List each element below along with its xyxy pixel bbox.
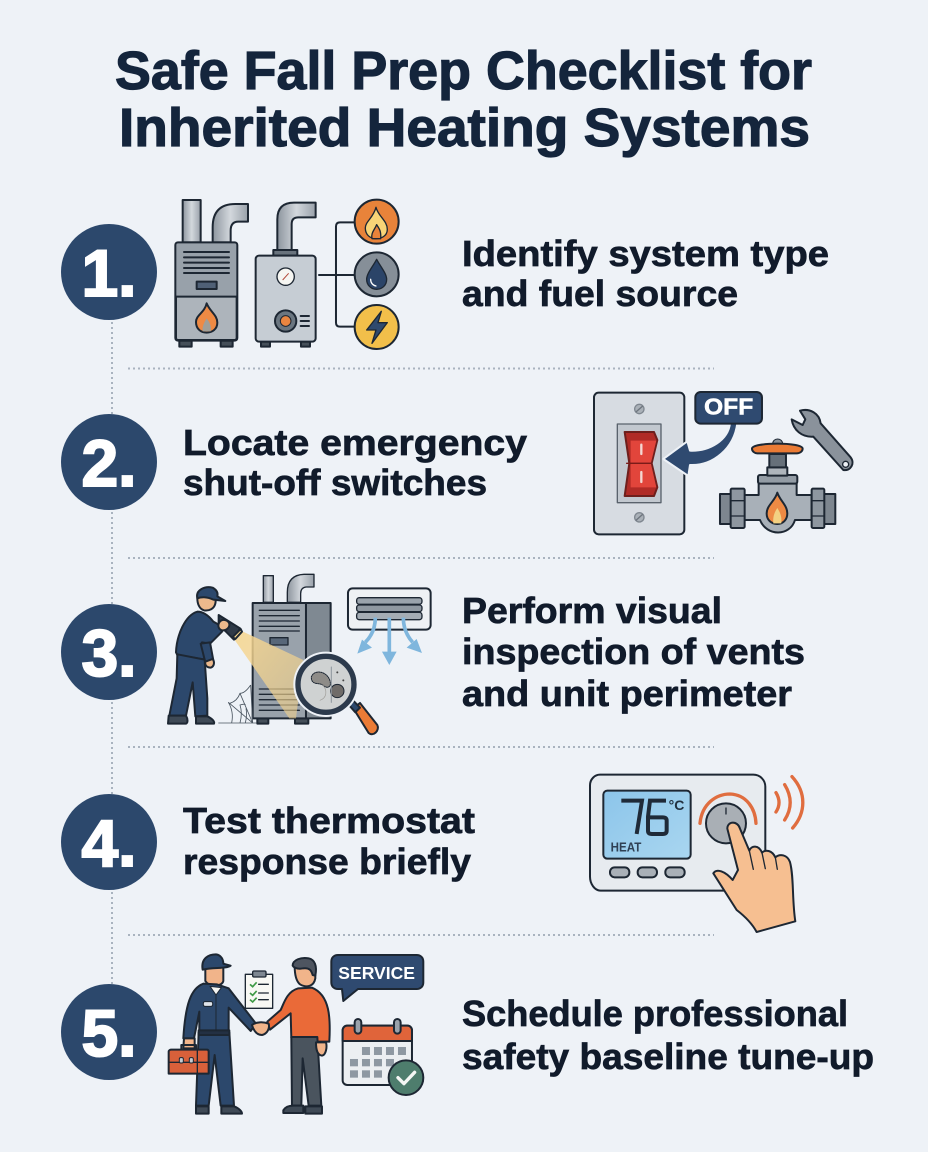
step 1 label: and fuel source	[462, 273, 738, 314]
step 1 number badge: 1.	[81, 236, 137, 310]
step 5 label: safety baseline tune-up	[462, 1036, 874, 1077]
icon: thermostat and hand: HEAT	[611, 840, 642, 854]
step 4 label: Test thermostat	[183, 800, 475, 841]
step 2 label: shut-off switches	[183, 462, 487, 503]
step 3 number badge: 3.	[81, 616, 137, 690]
step 3 label: inspection of vents	[462, 631, 805, 672]
icon: technician handshake, service bubble and calendar	[169, 954, 423, 1114]
step 2 label	[183, 422, 527, 503]
step 4 number badge	[61, 794, 157, 890]
step 4 label	[183, 800, 475, 882]
step 3 label	[462, 590, 805, 714]
step 5 label: Schedule professional	[462, 993, 848, 1034]
icon: thermostat and hand	[590, 775, 803, 932]
step 5 number badge: 5.	[81, 996, 137, 1070]
icon: furnace, boiler and fuel sources	[175, 200, 399, 349]
technician body	[183, 984, 256, 1038]
step 4 number badge: 4.	[81, 806, 137, 880]
icon: emergency switch and gas valve: OFF	[704, 394, 753, 420]
step 2 number badge	[61, 414, 157, 510]
step 1 label	[462, 233, 829, 314]
icon: technician handshake, service bubble and calendar: SERVICE	[338, 963, 415, 983]
icon: thermostat and hand: °C	[669, 797, 684, 813]
step 3 label: and unit perimeter	[462, 673, 792, 714]
step 2 number badge: 2.	[81, 426, 137, 500]
customer body	[267, 988, 330, 1042]
icon: technician with flashlight	[168, 587, 242, 724]
step 3 number badge	[61, 604, 157, 700]
icon: technician inspecting furnace and vent	[168, 574, 431, 734]
step 2 label: Locate emergency	[183, 422, 527, 463]
step 3 label: Perform visual	[462, 590, 722, 631]
icon: emergency switch and gas valve	[594, 392, 853, 534]
step 4 label: response briefly	[183, 841, 471, 882]
title: Safe Fall Prep Checklist for	[115, 41, 812, 101]
step 1 label: Identify system type	[462, 233, 829, 274]
step 5 label	[462, 993, 874, 1077]
title	[115, 41, 812, 158]
title: Inherited Heating Systems	[119, 98, 810, 158]
step 5 number badge	[61, 984, 157, 1080]
icon: cobweb	[218, 685, 257, 723]
step 1 number badge	[61, 224, 157, 320]
